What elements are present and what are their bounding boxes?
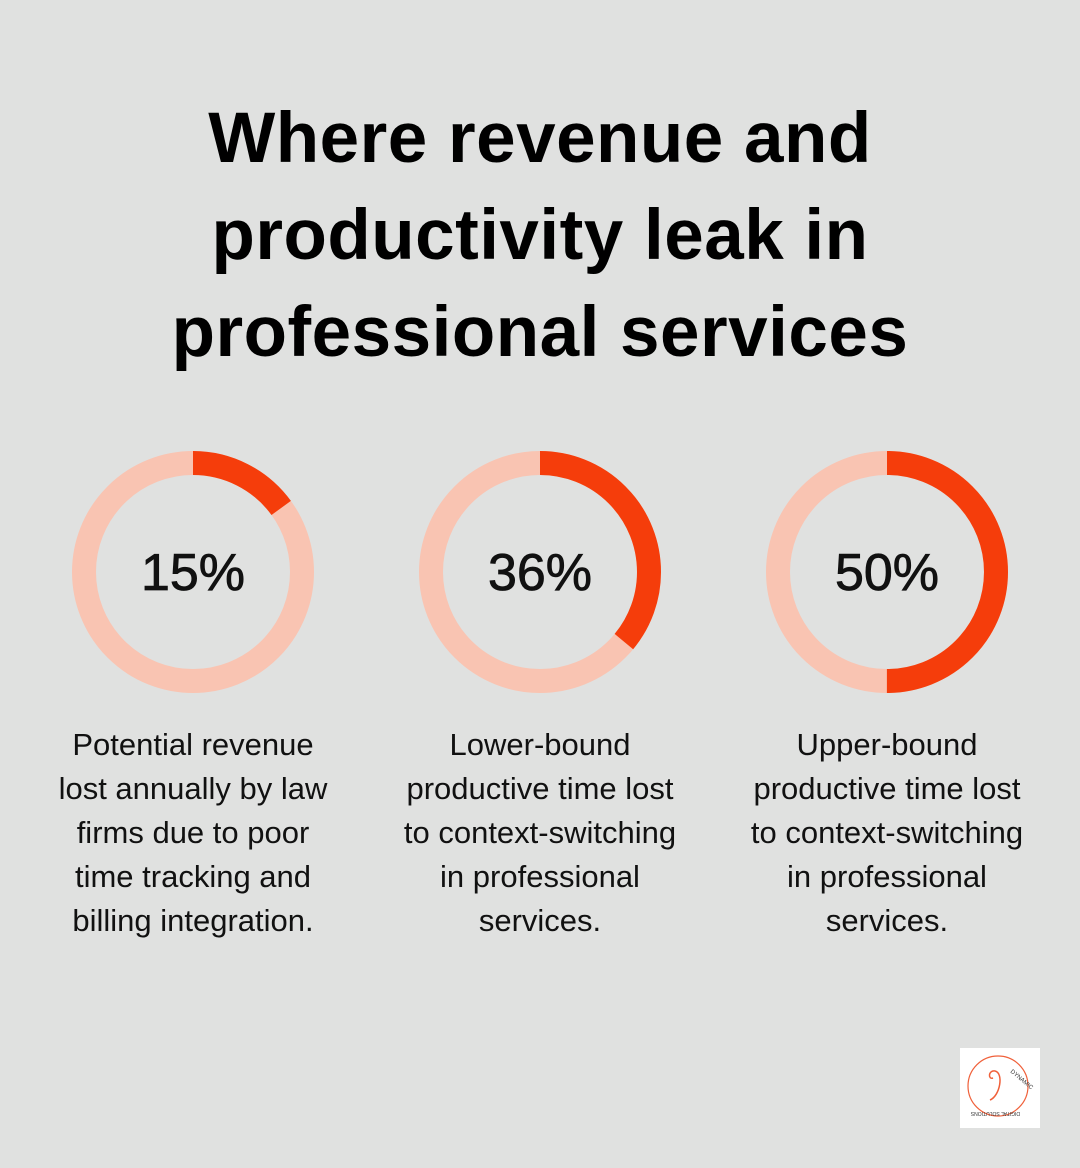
text: 15% description: lost annually by law <box>59 771 327 806</box>
text: 36% description <box>404 727 676 938</box>
title <box>172 99 908 372</box>
donut: 15% <box>72 451 314 693</box>
text: 50% description: to context-switching <box>751 815 1023 850</box>
title: productivity leak in <box>211 196 869 275</box>
text: 50% description: Upper-bound <box>797 727 977 762</box>
donut: 15%: 15% <box>141 544 245 602</box>
logo: DIGITAL SOLUTIONS <box>970 1110 1020 1116</box>
text: 15% description: time tracking and <box>75 859 311 894</box>
text: 15% description: firms due to poor <box>77 815 309 850</box>
text: 36% description: services. <box>479 903 601 938</box>
logo: DYNAMIC <box>1009 1069 1034 1092</box>
title: Where revenue and <box>208 99 872 178</box>
donut: 36%: 36% <box>488 544 592 602</box>
text: 36% description: to context-switching <box>404 815 676 850</box>
text: 36% description: Lower-bound <box>450 727 630 762</box>
text: 50% description: productive time lost <box>753 771 1021 806</box>
text: 50% description: in professional <box>787 859 987 894</box>
text: 36% description: productive time lost <box>406 771 674 806</box>
text: 50% description: services. <box>826 903 948 938</box>
title: professional services <box>172 293 908 372</box>
text: 15% description: billing integration. <box>72 903 314 938</box>
logo <box>960 1048 1040 1128</box>
donut: 36% <box>419 451 661 693</box>
text: 15% description <box>59 727 328 938</box>
donut: 50% <box>766 451 1008 693</box>
text: 50% description <box>751 727 1023 938</box>
donut: 50%: 50% <box>835 544 939 602</box>
text: 15% description: Potential revenue <box>72 727 314 762</box>
text: 36% description: in professional <box>440 859 640 894</box>
